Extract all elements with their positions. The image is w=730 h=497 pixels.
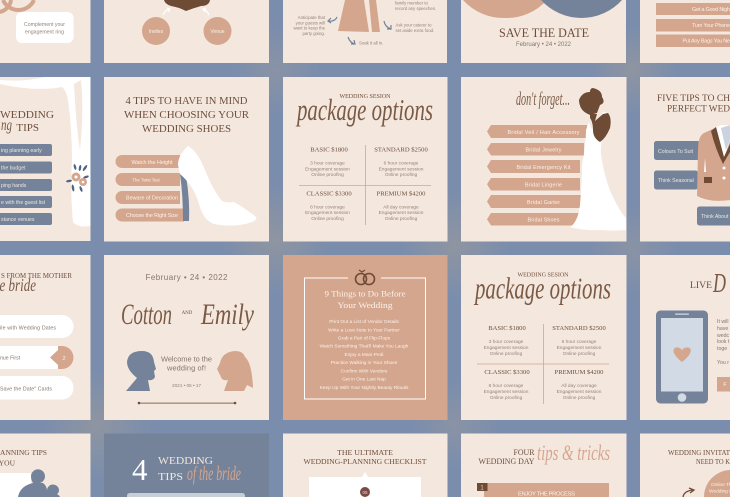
block: classic: 8 hour coverage [310, 204, 345, 210]
numeral: 4: 4 [132, 452, 148, 487]
arrows: slate curved pointers [328, 17, 391, 44]
illustration: couple silhouette [18, 469, 60, 497]
block: classic [305, 190, 352, 222]
marker: tan arrow number: 2 [62, 356, 66, 362]
text: and: AND [182, 311, 193, 316]
row: shoes [487, 213, 583, 226]
panel: package options two [461, 255, 626, 420]
row: watch the height [116, 155, 180, 168]
row: garter: Bridal Garter [527, 200, 560, 206]
block: premium: Engagement session [557, 389, 602, 395]
block: premium: Engagement session [379, 210, 424, 216]
list: nine things: Practice Walking in Your Shoes [331, 360, 398, 366]
text: party note: your guests will [296, 20, 325, 26]
circle: venue [204, 17, 232, 45]
shape: tan arch [461, 0, 547, 18]
block: premium [377, 190, 426, 222]
panel: package options one [283, 77, 448, 242]
heading: checklist: WEDDING-PLANNING CHECKLIST [304, 457, 427, 466]
heading: of the bride: of the bride [187, 463, 241, 485]
heading: five tips [657, 93, 730, 114]
row: watch the height: Watch the Height [132, 160, 173, 166]
illustration: phone [656, 310, 708, 404]
heading: checklist [304, 448, 427, 466]
list: nine things: Confirm With Vendors [341, 368, 388, 374]
pill: think seasonal: Think Seasonal [658, 178, 694, 184]
text: party note: Anticipate that [298, 15, 326, 20]
block: basic: BASIC $1800 [310, 146, 348, 154]
heading: planning tips [0, 448, 47, 468]
row: distance venues: stance venues [1, 217, 35, 223]
circle: online tips [704, 470, 730, 497]
text: wedding session: WEDDING SESION [518, 272, 569, 278]
heading: tips and tricks: tips & tricks [537, 441, 610, 466]
heading: checklist: THE ULTIMATE [337, 448, 393, 457]
block: basic: Engagement session [484, 345, 529, 351]
shape: beige wedge in dress [74, 80, 82, 150]
text: caterer note: Ask your caterer to [396, 22, 432, 28]
block: classic: 8 hour coverage [489, 383, 524, 389]
row: planning early: ing planning early [1, 148, 42, 154]
box: light card [127, 493, 245, 497]
pill: wedding dates: ile with Wedding Dates [0, 326, 56, 332]
block: standard: Engagement session [557, 345, 602, 351]
text: welcome: wedding of! [166, 364, 206, 372]
row: twist test: The Twist Test [132, 178, 160, 182]
text: live paragraph: It will [717, 319, 729, 325]
illustration: bride hair and arm [579, 88, 611, 142]
heading: nine things: Your Wedding [338, 300, 393, 310]
block: classic: Online proofing [311, 216, 344, 222]
heading: planning tips [1, 116, 39, 134]
marker: tan arrow number [50, 346, 73, 369]
illustration: shoe heel [180, 174, 189, 221]
panel: night before tips [640, 0, 730, 63]
icon: rings [356, 270, 374, 284]
pill: think about [697, 206, 730, 226]
text: live paragraph: toge [717, 346, 727, 352]
text: party note [293, 15, 326, 36]
list: nine things: Get in One Last Nap [342, 376, 386, 382]
block: standard: STANDARD $2500 [374, 146, 428, 154]
heading: shoes tips: 4 TIPS TO HAVE IN MIND [126, 96, 248, 107]
row: emergency kit: Bridal Emergency Kit [516, 165, 571, 171]
block: standard: Online proofing [563, 351, 596, 357]
heading: package options: package options [473, 271, 611, 305]
button: F [723, 382, 727, 388]
heading: five tips: FIVE TIPS TO CH [657, 93, 730, 103]
panel: speech and party tips [283, 0, 447, 63]
list: nine things: Write a Love Note to Your Partner [328, 328, 400, 334]
heading: tips: TIPS [158, 472, 183, 483]
row: get a good night: Get a Good Nigh [692, 7, 730, 13]
row: jewelry: Bridal Jewelry [526, 148, 562, 154]
block: premium: Online proofing [563, 395, 596, 401]
button [717, 377, 730, 392]
row: garter [487, 195, 582, 208]
block: standard [552, 325, 606, 357]
row: the budget [0, 162, 52, 174]
list: nine things [320, 319, 409, 391]
heading: shoes tips: WEDDING SHOES [142, 124, 231, 135]
panel: save the date [461, 0, 626, 63]
panel: wedding invitations [640, 434, 730, 497]
heading: wedding: WEDDING [158, 456, 213, 467]
circle: venue: Venue [210, 29, 225, 35]
text: live paragraph: wedc [717, 333, 730, 339]
block: basic: Online proofing [490, 351, 523, 357]
heading: wedding day: WEDDING DAY [478, 457, 535, 466]
panel: live day phone [640, 255, 730, 420]
badge: number: 05 [362, 490, 368, 495]
heading: cotton: Cotton [121, 297, 172, 331]
pill: save the date cards: Save the Date" Cards [0, 386, 52, 392]
pill: wedding dates [0, 315, 74, 338]
pill: venue first: nue First [0, 356, 21, 362]
arrow: brown [683, 488, 694, 497]
heading: live: LIVE [690, 281, 712, 291]
block: basic: 3 hour coverage [489, 339, 524, 345]
row: lingerie [487, 178, 580, 190]
block: standard: 6 hour coverage [384, 160, 419, 166]
callout: complement your engagement ring: Complement your [24, 22, 65, 28]
row: the budget: the budget [1, 166, 26, 172]
row: right size: Choose the Right Size [126, 213, 178, 219]
illustration: bride silhouette [217, 351, 253, 391]
list: nine things: Watch Something That'll Make You Laugh [320, 344, 409, 350]
panel: don't forget bridal list [461, 77, 626, 242]
badge: number one: 1 [480, 486, 484, 492]
pill: think seasonal [654, 170, 698, 190]
icon: heart [673, 347, 691, 362]
text: speech note: family member to [395, 0, 429, 6]
panel: nine things before your wedding [283, 255, 448, 420]
block: basic: Engagement session [305, 166, 350, 172]
block: classic: CLASSIC $3300 [306, 190, 352, 198]
heading: planning tips: ng [1, 116, 12, 133]
list: nine things: Enjoy a Mani-Pedi [345, 352, 383, 358]
shape: slate arch [541, 0, 622, 18]
panel: tips from the mother of the bride [0, 255, 90, 420]
text: caterer note: set aside extra food. [396, 28, 434, 33]
text: caterer note [396, 22, 434, 33]
row: guest list: e with the guest list [1, 200, 46, 206]
panel: four wedding tips of the bride [104, 434, 269, 497]
badge: number [360, 487, 370, 497]
heading: the bride script: e bride [0, 276, 36, 296]
heading: don't forget: don't forget... [516, 88, 570, 110]
row: guest list [0, 196, 52, 208]
row: veil [487, 125, 587, 138]
row: decoration: Beware of Decoration [126, 196, 178, 202]
row: helping hands [0, 179, 52, 191]
panel: wedding planning tips with dress [0, 77, 90, 241]
circle: invites: Invites [149, 29, 164, 35]
row: twist test [116, 173, 180, 186]
text: party note: want to keep the [293, 26, 326, 30]
text: party note: party going. [303, 31, 325, 36]
card: checklist [309, 472, 421, 497]
heading: emily: Emily [200, 297, 255, 331]
text: live paragraph: have [717, 326, 728, 332]
pill: save the date cards [0, 376, 74, 400]
text: live paragraph: look t [717, 339, 730, 345]
block: standard: Online proofing [385, 172, 418, 178]
heading: nine things: 9 Things to Do Before [324, 288, 406, 298]
heading: planning tips: ANNING TIPS [0, 448, 47, 457]
callout: complement your engagement ring: engagement ring [25, 30, 64, 36]
row: distance venues [0, 213, 52, 225]
block: premium: All day coverage [383, 204, 419, 210]
row: right size [116, 208, 184, 222]
block: classic: Engagement session [484, 389, 529, 395]
block: premium: PREMIUM $4200 [555, 369, 604, 376]
row: lingerie: Bridal Lingerie [525, 182, 562, 188]
list: nine things: Keep Up With Your Nightly Beauty Rituals [320, 385, 409, 391]
pill: venue first [0, 346, 59, 369]
block: basic: 3 hour coverage [310, 160, 345, 166]
block: classic [484, 369, 530, 401]
list: nine things: Grab a Pair of Flip-Flops [338, 336, 391, 342]
icon: floral sprig [66, 164, 89, 192]
callout: complement your engagement ring [16, 12, 74, 43]
heading: from the mother: S FROM THE MOTHER [1, 271, 72, 280]
illustration: white dress and straps [0, 77, 90, 226]
text: welcome: Welcome to the [161, 354, 212, 364]
list: nine things: Print Out a List of Vendor Details [329, 319, 399, 325]
text: date: February • 24 • 2022 [516, 42, 572, 48]
heading: save the date: SAVE THE DATE [499, 25, 589, 40]
heading: four: FOUR [514, 448, 535, 457]
heading: shoes tips: WHEN CHOOSING YOUR [124, 110, 249, 121]
block: basic [305, 146, 350, 178]
block: basic: Online proofing [311, 172, 344, 178]
text: live paragraph [717, 319, 730, 366]
band: enjoy the process [484, 483, 609, 497]
heading: planning tips: TIPS [16, 122, 39, 134]
box: white card [0, 473, 31, 497]
row: jewelry [487, 143, 584, 156]
dividers [299, 145, 431, 225]
block: premium: Online proofing [385, 216, 418, 222]
panel: four wedding day tips and tricks [461, 434, 626, 497]
heading: five tips: PERFECT WED [667, 104, 730, 114]
icon: brown bouquet [164, 0, 210, 11]
badge: number one [477, 483, 488, 492]
heading: script d: D [712, 268, 726, 298]
block: basic: BASIC $1800 [488, 325, 526, 332]
circle: invites [142, 17, 170, 45]
panel: invites and venue [104, 0, 269, 63]
frame: white border [304, 278, 426, 399]
panel: wedding shoes tips [104, 77, 269, 242]
panel: wedding planning checklist [283, 434, 448, 497]
illustration: dress [338, 0, 380, 32]
block: standard: 6 hour coverage [562, 339, 597, 345]
heading: wedding invitations [668, 448, 730, 466]
row: emergency kit [487, 160, 580, 173]
block: standard [374, 146, 428, 178]
dividers [477, 324, 609, 404]
text: wedding session: WEDDING SESION [340, 93, 391, 100]
block: classic: Online proofing [490, 395, 523, 401]
row: planning early [0, 144, 52, 156]
text: speech note: record any speeches. [395, 6, 436, 11]
divider: dotted line [138, 402, 236, 404]
icon: wedding rings [0, 0, 34, 12]
illustration: bride white dress [570, 112, 626, 230]
panel: complement your ring (top left) [0, 0, 90, 63]
arrow: to invites [163, 8, 170, 15]
pill: colours to suit [654, 141, 700, 160]
block: basic [484, 325, 529, 357]
block: premium: All day coverage [561, 383, 597, 389]
row: decoration [116, 191, 180, 204]
row: helping hands: ping hands [1, 183, 27, 189]
text: date: February • 24 • 2022 [146, 273, 228, 282]
heading: nine things [324, 288, 406, 310]
panel: five tips suit [640, 77, 730, 242]
panel: cotton and emily welcome [104, 255, 269, 420]
row: veil: Bridal Veil / Hair Accessory [508, 130, 580, 136]
block: premium: PREMIUM $4200 [377, 190, 426, 198]
text: live paragraph: You r [717, 360, 729, 366]
text: speech note [395, 0, 436, 11]
row: turn your phone: Turn Your Phone [692, 23, 730, 29]
panel: planning tips couple [0, 434, 90, 497]
row: put any bags: Put Any Bags You Ne [682, 38, 730, 44]
block: standard: STANDARD $2500 [552, 325, 606, 332]
block: premium [555, 369, 604, 401]
arrow: to venue [203, 8, 209, 15]
illustration: white high heel [178, 146, 256, 226]
text: soak it in: Soak it all in. [359, 40, 383, 46]
illustration: groom silhouette [126, 351, 156, 391]
row: shoes: Bridal Shoes [528, 218, 560, 224]
text: numeric date: 2021 • 05 • 17 [172, 383, 201, 389]
illustration: tan suit jacket [697, 125, 730, 201]
text: welcome [161, 354, 212, 372]
block: standard: Engagement session [379, 166, 424, 172]
heading: shoes tips [124, 96, 249, 135]
heading: wedding: WEDDING [0, 109, 54, 121]
block: classic: CLASSIC $3300 [484, 369, 530, 376]
block: classic: Engagement session [305, 210, 350, 216]
pill: colours to suit: Colours To Suit [658, 149, 694, 155]
heading: package options: package options [295, 93, 433, 127]
